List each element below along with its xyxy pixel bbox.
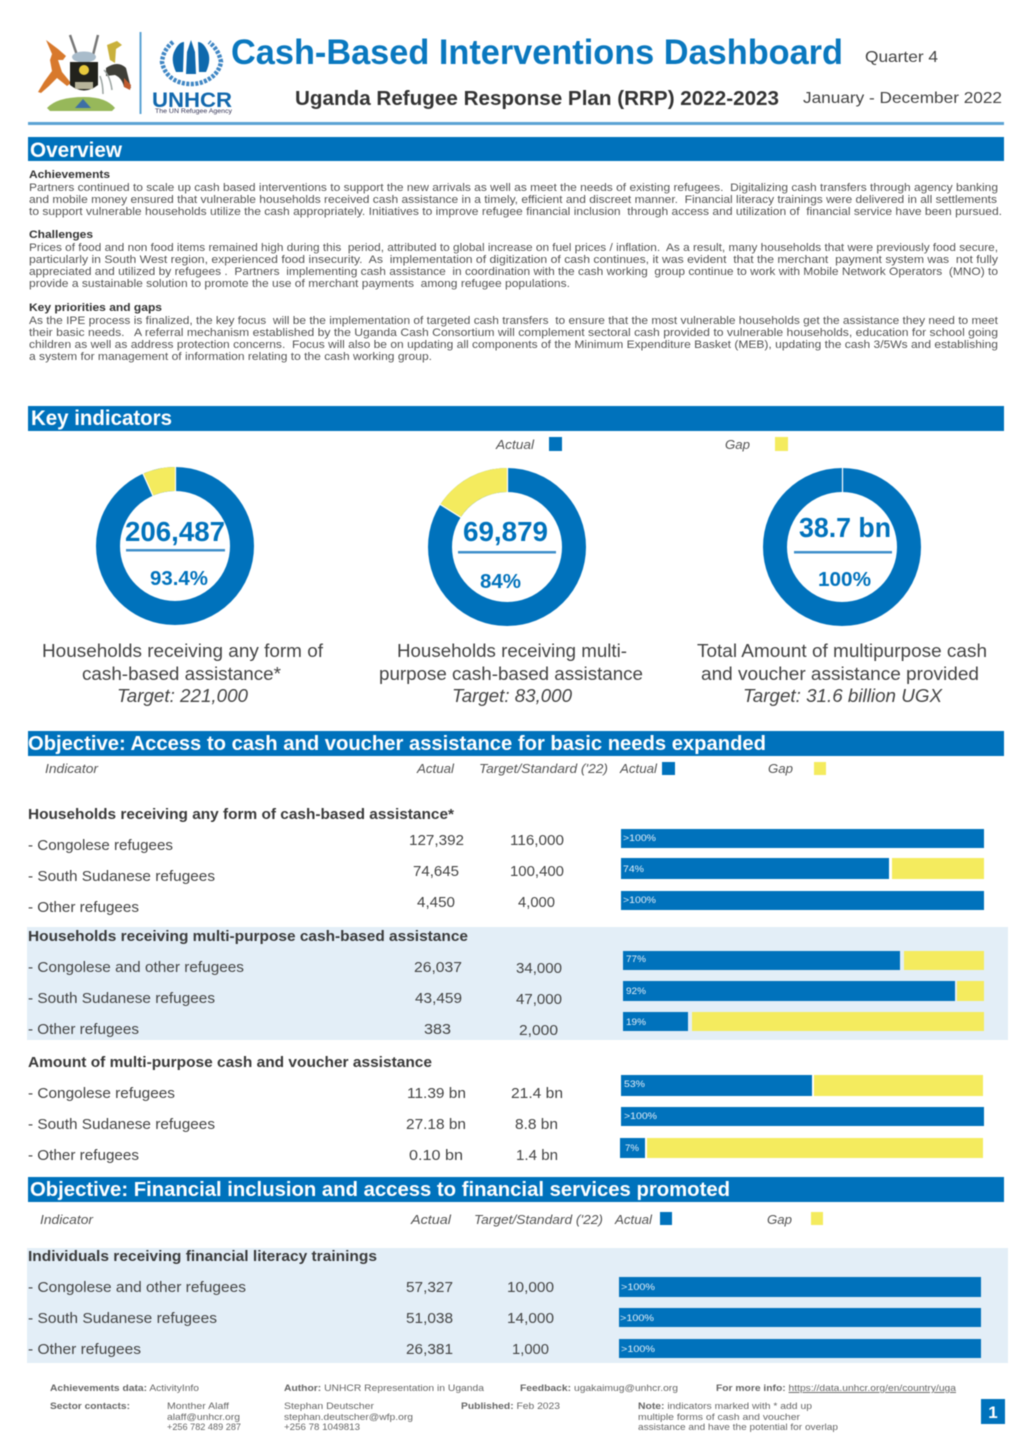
group: financial literacy trainings: - Congolese and other refugees (28, 1280, 246, 1296)
kpi: total amount: 100% (818, 569, 871, 591)
subtitle: Uganda Refugee Response Plan (RRP) 2022-2023 (295, 88, 779, 110)
bar chart: >100% (620, 1313, 654, 1323)
table header: Actual (614, 1212, 653, 1227)
footer: Monther Alaff (167, 1401, 229, 1412)
footer: +256 78 1049813 (284, 1422, 360, 1433)
kpi: households any form: Households receiving any form of (42, 641, 324, 661)
table header: Target/Standard ('22) (479, 761, 608, 776)
group: any form of cash-based assistance: Households receiving any form of cash-based assistance* (28, 807, 454, 823)
kpi: total amount: and voucher assistance provided (701, 664, 979, 684)
group: any form of cash-based assistance: 4,000 (518, 895, 555, 911)
footer: +256 782 489 287 (167, 1422, 241, 1433)
group: amount of multi-purpose cash: - South Sudanese refugees (28, 1117, 215, 1133)
panel: objective basic needs (27, 731, 1008, 1164)
icon: UNHCR logo (152, 40, 232, 115)
bar chart: 7% (625, 1143, 639, 1153)
bar chart: 74% (623, 864, 644, 874)
heading: objective basic needs: Objective: Access to cash and voucher assistance for basic needs expanded (28, 733, 766, 755)
footer: Sector contacts: (50, 1401, 130, 1412)
footer: For more info: https://data.unhcr.org/en/country/uga (716, 1383, 957, 1394)
footer: alaff@unhcr.org (167, 1412, 240, 1423)
group: any form of cash-based assistance: - Other refugees (28, 900, 139, 916)
kpi: total amount: Target: 31.6 billion UGX (743, 686, 943, 706)
divider (140, 32, 142, 114)
group: amount of multi-purpose cash: 27.18 bn (406, 1117, 466, 1133)
kpi: households any form: 93.4% (150, 568, 208, 590)
table header: Indicator (40, 1212, 94, 1227)
text block: challenges (29, 229, 999, 290)
header (38, 32, 1002, 115)
kpi: households multi-purpose: 84% (480, 571, 521, 593)
footer: multiple forms of cash and voucher (638, 1412, 800, 1423)
legend: Gap (725, 437, 750, 452)
kpi: total amount (697, 467, 987, 706)
table header: Actual (619, 761, 658, 776)
group: multi-purpose cash-based assistance: Households receiving multi-purpose cash-based assistance (28, 929, 468, 945)
heading: key indicators: Key indicators (31, 407, 172, 430)
group: any form of cash-based assistance: 116,000 (510, 833, 564, 849)
group: amount of multi-purpose cash: 11.39 bn (407, 1086, 466, 1102)
table header: Gap (767, 1212, 792, 1227)
icon: UNHCR logo: UNHCR (152, 89, 232, 112)
footer (50, 1383, 1005, 1433)
text block: key priorities and gaps: their basic needs. A referral mechanism established by the Uganda Cash Consortium will complement sectoral cash provided to vulnerable households, education for school going (29, 327, 998, 339)
panel: key indicators (28, 406, 1004, 706)
heading: objective basic needs (28, 731, 1004, 756)
date range: January - December 2022 (803, 90, 1002, 107)
text block: achievements: Partners continued to scale up cash based interventions to support the new arrivals as well as meet the needs of existing refugees. Digitalizing cash transfers through agency banking (29, 182, 998, 194)
text block: challenges: provide a sustainable solution to promote the use of merchant payments among refugee populations. (29, 278, 570, 290)
page number: 1 (988, 1403, 998, 1422)
bar chart: >100% (623, 895, 656, 905)
text block: achievements: Achievements (29, 169, 110, 181)
group: amount of multi-purpose cash: Amount of multi-purpose cash and voucher assistance (28, 1055, 432, 1071)
group: amount of multi-purpose cash: - Congolese refugees (28, 1086, 175, 1102)
bar chart: 19% (626, 1017, 646, 1027)
group: any form of cash-based assistance: 100,400 (510, 864, 564, 880)
group: financial literacy trainings: - Other refugees (28, 1342, 141, 1358)
footer: stephan.deutscher@wfp.org (284, 1412, 413, 1423)
group: amount of multi-purpose cash: 0.10 bn (409, 1148, 463, 1164)
group: multi-purpose cash-based assistance: 43,459 (415, 991, 462, 1007)
footer: Published: Feb 2023 (461, 1401, 560, 1412)
group: financial literacy trainings: Individuals receiving financial literacy trainings (28, 1249, 377, 1265)
bar chart: 53% (624, 1079, 645, 1089)
panel: objective financial inclusion (27, 1177, 1008, 1363)
table header: Target/Standard ('22) (474, 1212, 603, 1227)
kpi: households any form: Target: 221,000 (117, 686, 248, 706)
text block: challenges: Challenges (29, 229, 93, 241)
footer: Achievements data: ActivityInfo (50, 1383, 199, 1394)
donut chart 100% (775, 467, 909, 614)
table header (45, 761, 826, 776)
bar chart: 77% (626, 954, 646, 964)
group: multi-purpose cash-based assistance: 26,037 (414, 960, 462, 976)
footer: assistance and have the potential for overlap (638, 1422, 838, 1433)
group: financial literacy trainings: - South Sudanese refugees (28, 1311, 217, 1327)
group: amount of multi-purpose cash: 8.8 bn (515, 1117, 558, 1133)
text block: key priorities and gaps: children as well as address protection concerns. Focus will also be on updating all components of the Minimum Expenditure Basket (MEB), updating the cash 3/5Ws and establishing (29, 339, 998, 351)
footer: Stephan Deutscher (284, 1401, 374, 1412)
group: multi-purpose cash-based assistance: 383 (424, 1022, 451, 1038)
group: financial literacy trainings (27, 1248, 1008, 1363)
text block: challenges: particularly in South West region, experienced food insecurity. As implementation of digitization of cash continues, it was evident that the merchant payment system was not fully (29, 254, 999, 266)
legend (495, 437, 788, 452)
group: financial literacy trainings: 57,327 (406, 1280, 453, 1296)
text block: achievements: and mobile money ensured that vulnerable households received cash assistance in a timely, efficient and discreet manner. Financial literacy trainings were delivered in all settlements (29, 194, 998, 206)
kpi: households multi-purpose: Target: 83,000 (452, 686, 572, 706)
bar chart: >100% (623, 833, 656, 843)
kpi: households any form: cash-based assistance* (82, 664, 281, 684)
group: financial literacy trainings: 26,381 (406, 1342, 453, 1358)
donut chart 93.4% (108, 466, 242, 613)
group: multi-purpose cash-based assistance: - South Sudanese refugees (28, 991, 215, 1007)
title: Cash-Based Interventions Dashboard (231, 33, 843, 72)
quarter label: Quarter 4 (865, 49, 938, 66)
group: any form of cash-based assistance: - South Sudanese refugees (28, 869, 215, 885)
kpi: households any form: 206,487 (125, 516, 225, 547)
group: multi-purpose cash-based assistance: - Other refugees (28, 1022, 139, 1038)
text block: key priorities and gaps (29, 302, 998, 363)
icon: UNHCR logo: The UN Refugee Agency (155, 109, 232, 115)
text block: achievements (29, 169, 1002, 218)
footer: Author: UNHCR Representation in Uganda (284, 1383, 485, 1394)
bar chart (623, 951, 984, 1031)
group: financial literacy trainings: 1,000 (512, 1342, 549, 1358)
heading: objective financial inclusion: Objective: Financial inclusion and access to financial services promoted (30, 1179, 730, 1201)
text block: challenges: Prices of food and non food items remained high during this period, attributed to global increase on fuel prices / inflation. As a result, many households that were previously food secure, (29, 242, 998, 254)
icon: Uganda coat of arms (38, 35, 131, 111)
table header (40, 1212, 823, 1227)
table header: Indicator (45, 761, 99, 776)
group: financial literacy trainings: 51,038 (406, 1311, 453, 1327)
heading: overview: Overview (30, 139, 123, 162)
panel: overview (28, 137, 1004, 363)
bar chart: >100% (624, 1111, 657, 1121)
group: financial literacy trainings: 14,000 (507, 1311, 554, 1327)
group: multi-purpose cash-based assistance (27, 927, 1008, 1040)
bar chart (620, 1075, 984, 1158)
legend: Actual (495, 437, 535, 452)
heading: key indicators (28, 406, 1004, 431)
heading: objective financial inclusion (28, 1177, 1004, 1202)
table header: Actual (410, 1212, 452, 1227)
kpi: households any form (42, 466, 324, 706)
kpi: households multi-purpose: Households receiving multi- (397, 641, 627, 661)
text block: key priorities and gaps: As the IPE process is finalized, the key focus will be the implementation of targeted cash transfers to ensure that the most vulnerable households get the assistance they need to meet (29, 315, 998, 327)
kpi: households multi-purpose: 69,879 (463, 516, 548, 547)
group: financial literacy trainings: 10,000 (507, 1280, 554, 1296)
footer: Note: indicators marked with * add up (638, 1401, 812, 1412)
group: any form of cash-based assistance: 4,450 (417, 895, 455, 911)
kpi: total amount: 38.7 bn (799, 512, 891, 543)
group: amount of multi-purpose cash: 21.4 bn (511, 1086, 563, 1102)
kpi: total amount: Total Amount of multipurpose cash (697, 641, 987, 661)
bar chart: >100% (621, 1282, 655, 1292)
table header: Gap (768, 761, 793, 776)
bar chart (621, 829, 984, 910)
group: amount of multi-purpose cash (28, 1055, 984, 1164)
kpi: households multi-purpose: purpose cash-based assistance (379, 664, 643, 684)
bar chart (619, 1277, 981, 1358)
group: any form of cash-based assistance: 127,392 (409, 833, 464, 849)
group: amount of multi-purpose cash: 1.4 bn (516, 1148, 558, 1164)
group: multi-purpose cash-based assistance: - Congolese and other refugees (28, 960, 244, 976)
group: multi-purpose cash-based assistance: 47,000 (516, 992, 562, 1008)
group: any form of cash-based assistance: - Congolese refugees (28, 838, 173, 854)
table header: Actual (416, 761, 455, 776)
text block: challenges: appreciated and utilized by refugees . Partners implementing cash assistance in coordination with the cash working group continue to work with Mobile Network Operators (MNO) to (29, 266, 998, 278)
text block: key priorities and gaps: a system for management of information relating to the cash working group. (29, 351, 432, 363)
heading: overview (28, 137, 1004, 162)
group: any form of cash-based assistance: 74,645 (413, 864, 459, 880)
bar chart: >100% (621, 1344, 655, 1354)
group: any form of cash-based assistance (28, 807, 984, 916)
footer: Feedback: ugakaimug@unhcr.org (520, 1383, 678, 1394)
group: multi-purpose cash-based assistance: 34,000 (516, 961, 562, 977)
text block: achievements: to support vulnerable households utilize the cash appropriately. Initiatives to improve refugee financial inclusion through access and utilization of financial service have been pursued. (29, 206, 1002, 218)
kpi: households multi-purpose (379, 467, 643, 706)
bar chart: 92% (626, 986, 646, 996)
group: amount of multi-purpose cash: - Other refugees (28, 1148, 139, 1164)
page number (981, 1399, 1005, 1424)
group: multi-purpose cash-based assistance: 2,000 (519, 1023, 558, 1039)
text block: key priorities and gaps: Key priorities and gaps (29, 302, 162, 314)
donut chart 84% (440, 467, 574, 614)
